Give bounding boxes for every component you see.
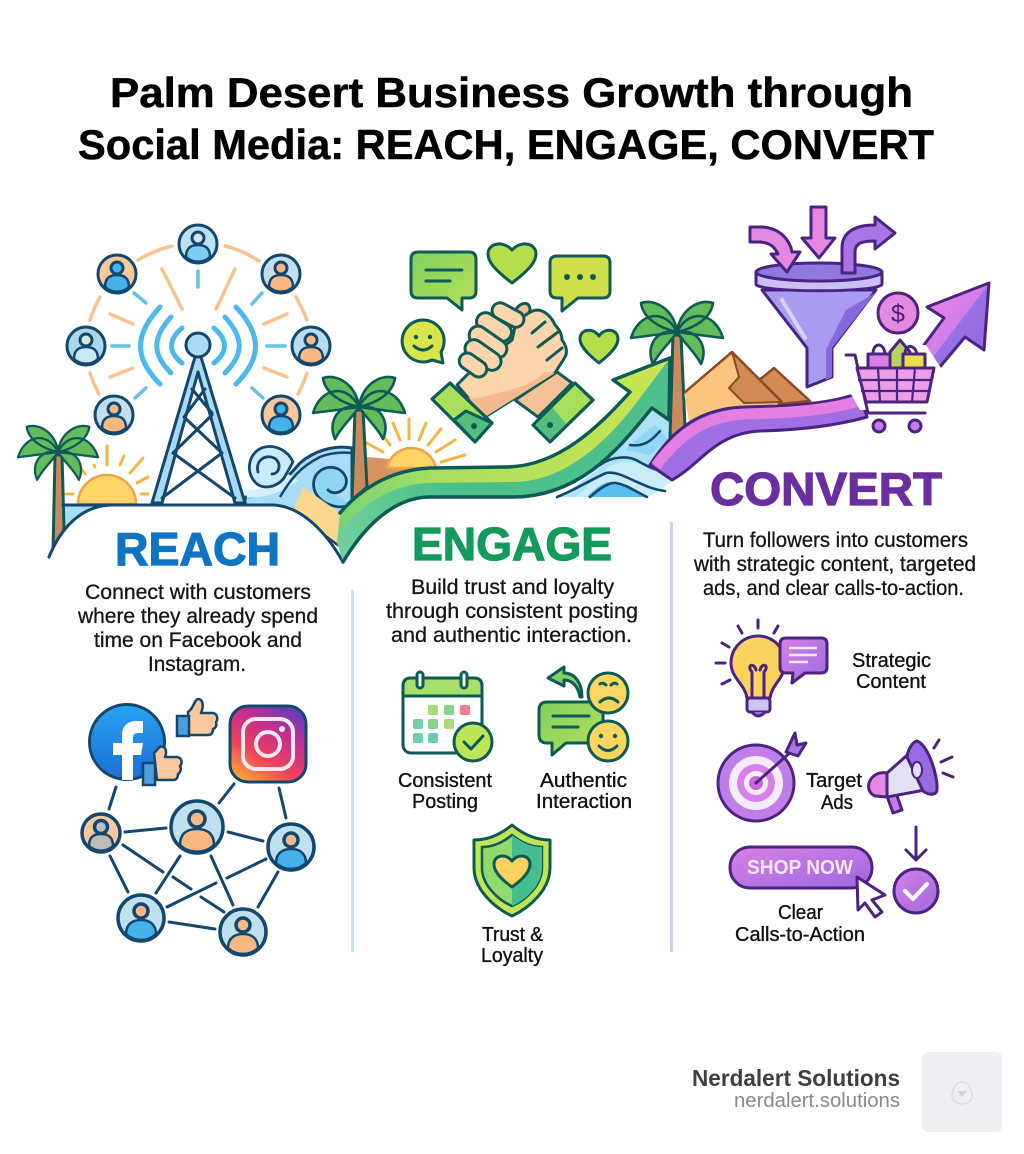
illustration: signal waves [140, 307, 256, 384]
rear arm [515, 372, 572, 417]
illustration: funnel with arrows [750, 207, 895, 387]
label: clear calls to action [735, 902, 865, 946]
heading: CONVERT: CONVERT [710, 463, 942, 515]
text block: engage description: Build trust and loyalty [411, 576, 615, 599]
icon: instagram [230, 706, 306, 782]
label: target ads: Ads [821, 792, 853, 814]
label: strategic content [852, 650, 931, 693]
button: shop now: SHOP NOW [747, 857, 853, 879]
illustration: white hill [49, 505, 343, 600]
icon: trust shield [474, 825, 550, 916]
text block: reach description: time on Facebook and [94, 629, 302, 652]
icon: shopping cart [840, 340, 941, 432]
icon: megaphone [869, 740, 953, 813]
left cuff [432, 383, 492, 442]
heading: REACH: REACH [115, 523, 280, 575]
icon: light bulb with bubble [716, 620, 827, 716]
footer: brand name [692, 1065, 900, 1112]
illustration: desert pyramids [684, 352, 810, 427]
label: target ads [806, 770, 862, 814]
icon: thumbs up on facebook [143, 747, 182, 785]
text block: convert description: Turn followers into customers [703, 529, 968, 552]
divider: engage convert [670, 522, 673, 952]
label: trust and loyalty [481, 924, 544, 967]
illustration: orange ring and spokes [90, 246, 307, 398]
icon: big purple arrow [924, 283, 989, 368]
illustration: purple path band [650, 393, 867, 480]
icon: down arrow [906, 827, 926, 860]
label: clear calls to action: Clear [778, 902, 823, 924]
icon: cursor [857, 877, 885, 917]
label: trust and loyalty: Trust & [482, 924, 544, 946]
illustration: palm tree right [631, 302, 723, 438]
text block: engage description: and authentic interaction. [391, 624, 632, 647]
icon: authentic interaction [539, 667, 628, 761]
icons: audience avatars around tower [67, 225, 330, 434]
text block: convert description: with strategic content, targeted [693, 553, 976, 576]
text block: convert description [693, 529, 976, 600]
title: Social Media: REACH, ENGAGE, CONVERT [78, 121, 934, 168]
text block: reach description [77, 581, 318, 676]
icon: chat bubble lime [550, 256, 610, 311]
illustration: palm tree middle [313, 377, 405, 500]
label: authentic interaction: Interaction [536, 791, 632, 813]
illustration: waves [245, 447, 352, 545]
arrow in left [750, 227, 800, 272]
illustration: green growth arrow [337, 358, 670, 562]
footer: brand name: Nerdalert Solutions [692, 1065, 900, 1091]
label: consistent posting: Consistent [398, 770, 492, 792]
icon: check badge [894, 869, 938, 913]
text block: reach description: where they already spend [77, 605, 318, 628]
text block: convert description: ads, and clear calls-to-action. [703, 577, 964, 600]
right cuff [533, 383, 593, 442]
text block: reach description: Instagram. [148, 653, 246, 676]
illustration: water left of REACH hill [63, 505, 112, 537]
icon: smile bubble [402, 320, 444, 363]
finger lines [532, 322, 562, 360]
text block: reach description: Connect with customers [85, 581, 311, 604]
icon: chat bubble green [411, 252, 476, 310]
label: trust and loyalty: Loyalty [481, 945, 543, 967]
label: consistent posting [398, 770, 492, 813]
heading: ENGAGE: ENGAGE [412, 518, 612, 570]
icon: calendar [403, 672, 492, 761]
text block: engage description: through consistent posting [386, 600, 638, 623]
illustration: broadcast tower [152, 333, 245, 503]
icon: facebook [90, 704, 164, 780]
icon: thumbs up floating [177, 699, 217, 736]
label: clear calls to action: Calls-to-Action [735, 924, 865, 946]
title: Palm Desert Business Growth through [110, 69, 913, 116]
icon: heart top [488, 244, 536, 283]
button: shop now [730, 847, 872, 888]
icon: dollar coin: $ [891, 300, 905, 328]
label: strategic content: Strategic [852, 650, 931, 672]
arrow in center [802, 207, 835, 258]
front hand [457, 310, 566, 417]
label: target ads: Target [806, 770, 862, 792]
label: consistent posting: Posting [412, 791, 478, 813]
illustration: sun left [66, 446, 148, 504]
title [78, 69, 934, 168]
network: customer connections [82, 784, 314, 955]
footer: brand name: nerdalert.solutions [734, 1090, 900, 1112]
thumb tip [515, 303, 530, 322]
text block: engage description [386, 576, 638, 647]
hand shadow [468, 372, 555, 417]
illustration: hill and sun behind second palm [362, 419, 465, 496]
divider: reach engage [351, 590, 354, 952]
label: strategic content: Content [856, 671, 926, 693]
label: authentic interaction: Authentic [540, 770, 627, 792]
icon: dollar coin [878, 293, 918, 333]
icon: target [718, 733, 806, 821]
illustration: palm tree left [18, 426, 98, 557]
icon: heart right [580, 330, 618, 363]
arrow out right [842, 217, 895, 273]
label: authentic interaction [536, 770, 632, 813]
illustration: handshake [432, 300, 593, 442]
fist fingers [456, 300, 527, 380]
illustration: blue water under green arrow [557, 408, 673, 497]
footer: logo tile [922, 1052, 1002, 1132]
